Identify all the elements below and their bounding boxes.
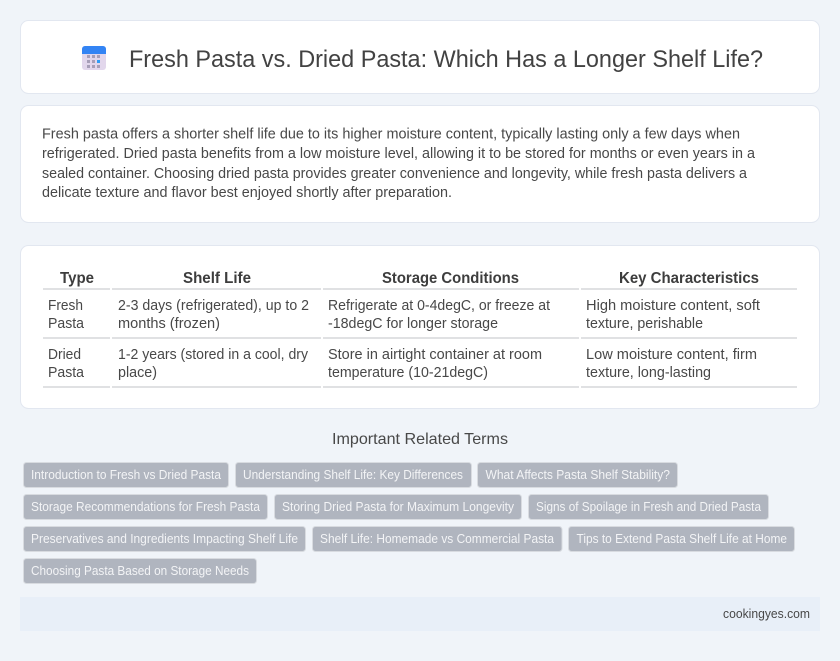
table row: dried pasta: Pasta [48, 365, 85, 381]
tag: Introduction to Fresh vs Dried Pasta [31, 468, 221, 482]
tag [24, 462, 228, 488]
icon: calendar [82, 46, 106, 70]
tag [24, 494, 268, 520]
tag [274, 494, 522, 520]
table header: Type [60, 270, 94, 287]
tag [236, 462, 472, 488]
table header: Shelf Life [183, 270, 251, 287]
tag: Preservatives and Ingredients Impacting Shelf Life [31, 532, 298, 546]
tag [24, 526, 306, 552]
tag: Storing Dried Pasta for Maximum Longevity [282, 500, 515, 514]
table row: fresh pasta: High moisture content, soft [586, 298, 760, 314]
tag [24, 558, 256, 584]
table header [43, 270, 797, 290]
tag [568, 526, 794, 552]
panel: introduction [20, 106, 820, 222]
tag [528, 494, 768, 520]
panel: header [20, 20, 820, 94]
footer source: cookingyes.com [723, 607, 810, 621]
table row: fresh pasta [43, 298, 797, 339]
table row: fresh pasta: 2-3 days (refrigerated), up to 2 [118, 298, 309, 314]
intro text: Fresh pasta offers a shorter shelf life due to its higher moisture content, typically lasting only a few days when [42, 126, 740, 142]
tag: Tips to Extend Pasta Shelf Life at Home [576, 532, 787, 546]
table row: dried pasta: 1-2 years (stored in a cool, dry [118, 347, 309, 363]
intro text: delicate texture and flavor best enjoyed shortly after preparation. [42, 185, 452, 201]
tag: Understanding Shelf Life: Key Differences [243, 468, 463, 482]
tag [312, 526, 562, 552]
table row: dried pasta: texture, long-lasting [586, 365, 711, 381]
panel: comparison table [20, 246, 820, 408]
related term tags [24, 462, 794, 584]
intro text: refrigerated. Dried pasta benefits from a low moisture level, allowing it to be stored for months or even years in a [42, 146, 756, 162]
table row: dried pasta [43, 347, 797, 388]
table row: fresh pasta: texture, perishable [586, 316, 703, 332]
table row: fresh pasta: Pasta [48, 316, 85, 332]
tag: What Affects Pasta Shelf Stability? [486, 468, 670, 482]
tag: Storage Recommendations for Fresh Pasta [31, 500, 260, 514]
table row: fresh pasta: Fresh [48, 298, 83, 314]
table row: dried pasta: Dried [48, 347, 81, 363]
table row: fresh pasta: Refrigerate at 0-4degC, or freeze at [328, 298, 550, 314]
title: Fresh Pasta vs. Dried Pasta: Which Has a Longer Shelf Life? [129, 46, 763, 73]
table row: dried pasta: place) [118, 365, 157, 381]
table row: dried pasta: Store in airtight container at room [328, 347, 542, 363]
intro text: sealed container. Choosing dried pasta provides greater convenience and longevity, while fresh pasta delivers a [42, 166, 748, 182]
intro text [42, 126, 756, 201]
tag: Choosing Pasta Based on Storage Needs [31, 564, 249, 578]
table row: fresh pasta: -18degC for longer storage [328, 316, 498, 332]
table row: dried pasta: temperature (10-21degC) [328, 365, 488, 381]
table row: fresh pasta: months (frozen) [118, 316, 220, 332]
table header: Key Characteristics [619, 270, 759, 287]
heading: related terms: Important Related Terms [332, 431, 508, 448]
footer [20, 597, 820, 631]
table row: dried pasta: Low moisture content, firm [586, 347, 757, 363]
tag: Shelf Life: Homemade vs Commercial Pasta [320, 532, 554, 546]
table header: Storage Conditions [382, 270, 519, 287]
tag: Signs of Spoilage in Fresh and Dried Pasta [536, 500, 761, 514]
tag [478, 462, 678, 488]
